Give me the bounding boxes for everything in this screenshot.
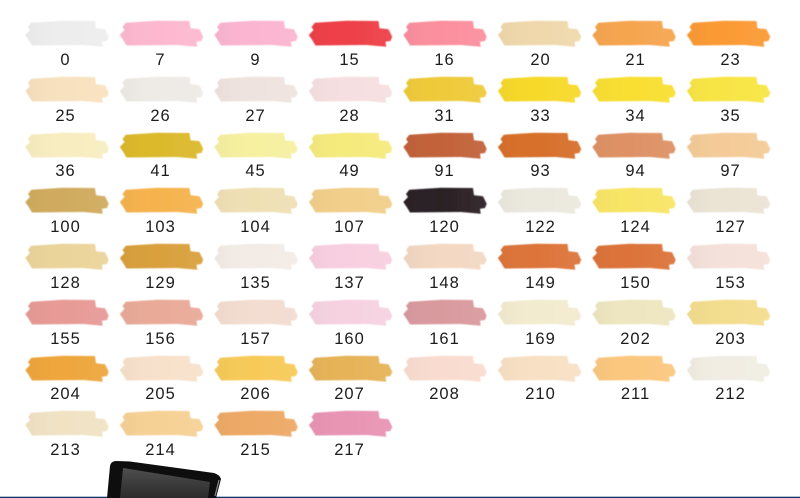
- swatch 45: 45: [245, 162, 266, 180]
- swatch 160: 160: [334, 330, 365, 348]
- swatch 93: [498, 133, 581, 180]
- swatch 127: 127: [715, 218, 746, 236]
- swatch 161: 161: [429, 330, 460, 348]
- swatch 28: [309, 77, 392, 125]
- swatch 212: [687, 356, 770, 403]
- swatch 148: [403, 244, 487, 292]
- swatch 149: 149: [525, 274, 556, 292]
- swatch 93: 93: [530, 162, 551, 180]
- swatch 135: [214, 244, 298, 292]
- swatch 169: 169: [525, 330, 556, 348]
- swatch 210: [498, 356, 581, 403]
- swatch 214: [120, 411, 203, 459]
- swatch 203: [687, 300, 770, 348]
- swatch 156: [120, 300, 203, 348]
- swatch 128: 128: [50, 274, 81, 292]
- swatch 135: 135: [240, 274, 271, 292]
- swatch 7: [120, 21, 203, 69]
- swatch 9: [214, 21, 298, 69]
- swatch 211: 211: [621, 385, 650, 403]
- swatch 155: [25, 300, 109, 348]
- swatch 23: [687, 21, 770, 69]
- swatch 94: [592, 133, 676, 180]
- swatch 25: 25: [55, 107, 76, 125]
- swatch 153: 153: [715, 274, 746, 292]
- swatch 129: [120, 244, 203, 292]
- swatch 41: 41: [150, 162, 171, 180]
- swatch 206: [214, 356, 298, 403]
- swatch 217: 217: [334, 441, 365, 459]
- swatch 122: [498, 188, 581, 236]
- swatch 45: [214, 133, 298, 180]
- swatch 33: [498, 77, 581, 125]
- swatch 204: 204: [50, 385, 81, 403]
- swatch 49: 49: [339, 162, 360, 180]
- swatch 100: 100: [50, 218, 81, 236]
- swatch 16: 16: [434, 51, 455, 69]
- swatch 34: 34: [625, 107, 646, 125]
- swatch 205: 205: [145, 385, 176, 403]
- swatch 103: [120, 188, 203, 236]
- swatch 34: [592, 77, 676, 125]
- swatch 15: 15: [339, 51, 360, 69]
- swatch 206: 206: [240, 385, 271, 403]
- swatch 21: 21: [625, 51, 646, 69]
- swatch 156: 156: [145, 330, 176, 348]
- swatch 213: [25, 411, 109, 459]
- swatch 100: [25, 188, 109, 236]
- swatch 36: [25, 133, 109, 180]
- swatch 215: 215: [240, 441, 271, 459]
- black marker case at the bottom edge: [107, 461, 221, 498]
- swatch 35: 35: [720, 107, 741, 125]
- swatch 169: [498, 300, 581, 348]
- swatch 31: 31: [434, 107, 455, 125]
- swatch 203: 203: [715, 330, 746, 348]
- swatch 208: [403, 356, 487, 403]
- swatch 124: 124: [620, 218, 651, 236]
- swatch 104: 104: [240, 218, 271, 236]
- swatch 28: 28: [339, 107, 360, 125]
- swatch 202: [592, 300, 676, 348]
- swatch 26: [120, 77, 203, 125]
- swatch 33: 33: [530, 107, 551, 125]
- swatch 210: 210: [525, 385, 556, 403]
- swatch 124: [592, 188, 676, 236]
- swatch 149: [498, 244, 581, 292]
- swatch 215: [214, 411, 298, 459]
- swatch 94: 94: [625, 162, 646, 180]
- swatch 16: [403, 21, 487, 69]
- swatch 148: 148: [429, 274, 460, 292]
- swatch 157: [214, 300, 298, 348]
- swatch 91: [403, 133, 487, 180]
- swatch 205: [120, 356, 203, 403]
- swatch 217: [309, 411, 392, 459]
- swatch 214: 214: [145, 441, 176, 459]
- swatch 103: 103: [145, 218, 176, 236]
- swatch 161: [403, 300, 487, 348]
- swatch 212: 212: [715, 385, 746, 403]
- swatch 20: 20: [530, 51, 551, 69]
- swatch 26: 26: [150, 107, 171, 125]
- swatch 36: 36: [55, 162, 76, 180]
- swatch 21: [592, 21, 676, 69]
- swatch 120: [403, 188, 487, 236]
- swatch 128: [25, 244, 109, 292]
- swatch 155: 155: [50, 330, 81, 348]
- swatch 208: 208: [429, 385, 460, 403]
- swatch 127: [687, 188, 770, 236]
- swatch 150: 150: [620, 274, 651, 292]
- swatch 9: 9: [250, 51, 261, 69]
- swatch 15: [309, 21, 392, 69]
- swatch 207: [309, 356, 392, 403]
- swatch 25: [25, 77, 109, 125]
- swatch 27: [214, 77, 298, 125]
- swatch 202: 202: [620, 330, 651, 348]
- swatch 0: 0: [60, 51, 71, 69]
- swatch 7: 7: [155, 51, 166, 69]
- swatch 23: 23: [720, 51, 741, 69]
- swatch 0: [25, 21, 109, 69]
- swatch 20: [498, 21, 581, 69]
- swatch 122: 122: [525, 218, 556, 236]
- swatch 120: 120: [429, 218, 460, 236]
- swatch 204: [25, 356, 109, 403]
- swatch 213: 213: [50, 441, 81, 459]
- swatch 129: 129: [145, 274, 176, 292]
- swatch 97: 97: [720, 162, 741, 180]
- swatch 27: 27: [245, 107, 266, 125]
- swatch 97: [687, 133, 770, 180]
- swatch 211: [592, 356, 676, 403]
- swatch 49: [309, 133, 392, 180]
- swatch 91: 91: [434, 162, 455, 180]
- swatch 137: [309, 244, 392, 292]
- swatch 160: [309, 300, 392, 348]
- swatch 31: [403, 77, 487, 125]
- swatch 41: [120, 133, 203, 180]
- swatch 107: 107: [334, 218, 365, 236]
- swatch 153: [687, 244, 770, 292]
- swatch 35: [687, 77, 770, 125]
- swatch 107: [309, 188, 392, 236]
- swatch 207: 207: [334, 385, 365, 403]
- swatch 150: [592, 244, 676, 292]
- swatch 157: 157: [240, 330, 271, 348]
- blue bottom band: [0, 497, 800, 498]
- swatch 137: 137: [334, 274, 365, 292]
- swatch 104: [214, 188, 298, 236]
